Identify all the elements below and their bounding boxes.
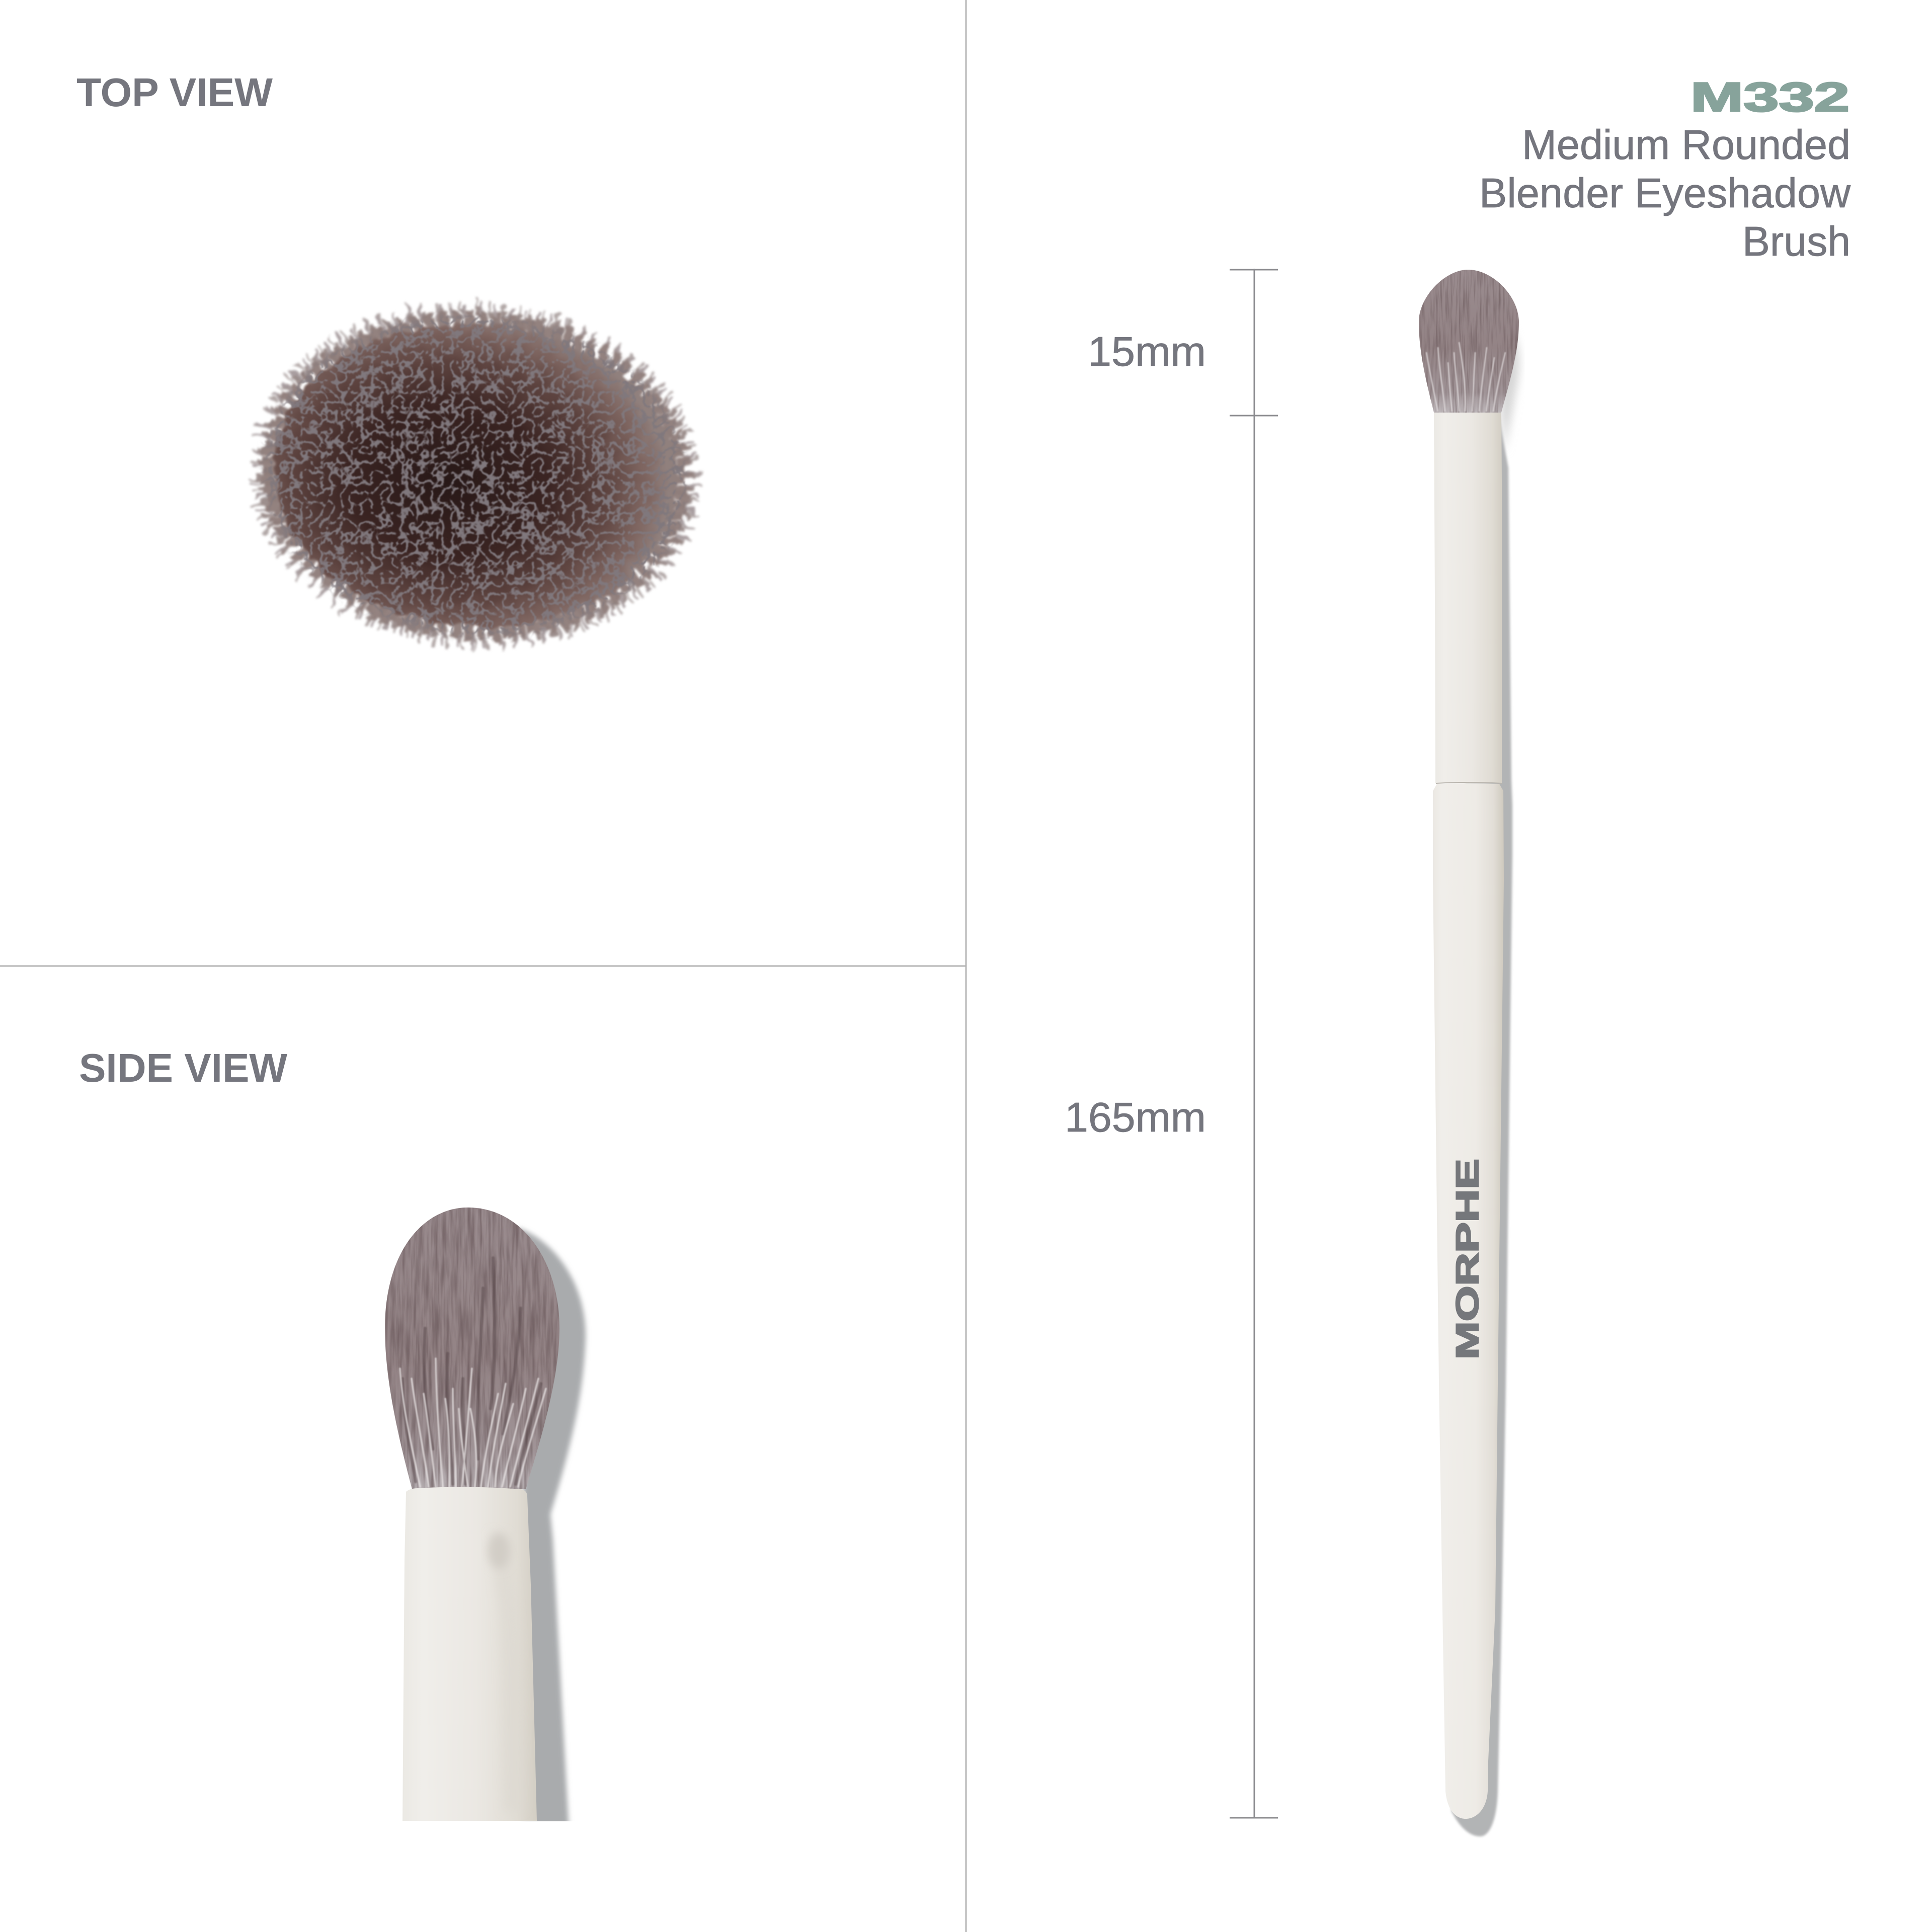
handle: full brush — [1433, 783, 1504, 1819]
product name: Medium Rounded — [1522, 121, 1850, 168]
cast shadow: side close-up — [518, 1228, 586, 1831]
label: handle length: 165mm — [1065, 1094, 1206, 1141]
cast shadow: full brush — [1452, 322, 1519, 1836]
label: bristle length: 15mm — [1088, 328, 1206, 375]
product name: Blender Eyeshadow — [1479, 170, 1851, 216]
full brush — [1414, 267, 1524, 1836]
photo: brush head from above — [248, 296, 704, 653]
bristles: side close-up — [385, 1208, 559, 1489]
bristles: full brush — [1419, 270, 1519, 413]
photo: brush close-up from the side — [377, 1202, 586, 1831]
dimension scale — [1065, 269, 1278, 1818]
product name: Brush — [1742, 218, 1850, 265]
ferrule: full brush — [1434, 413, 1502, 783]
ferrule: side close-up — [403, 1487, 537, 1821]
brand name on handle: MORPHE — [1450, 1159, 1485, 1359]
heading: side view: SIDE VIEW — [79, 1045, 287, 1090]
product name — [1479, 121, 1851, 265]
heading: top view: TOP VIEW — [76, 70, 273, 115]
panel dividers — [0, 0, 966, 1932]
model number: M332 — [1691, 74, 1849, 120]
